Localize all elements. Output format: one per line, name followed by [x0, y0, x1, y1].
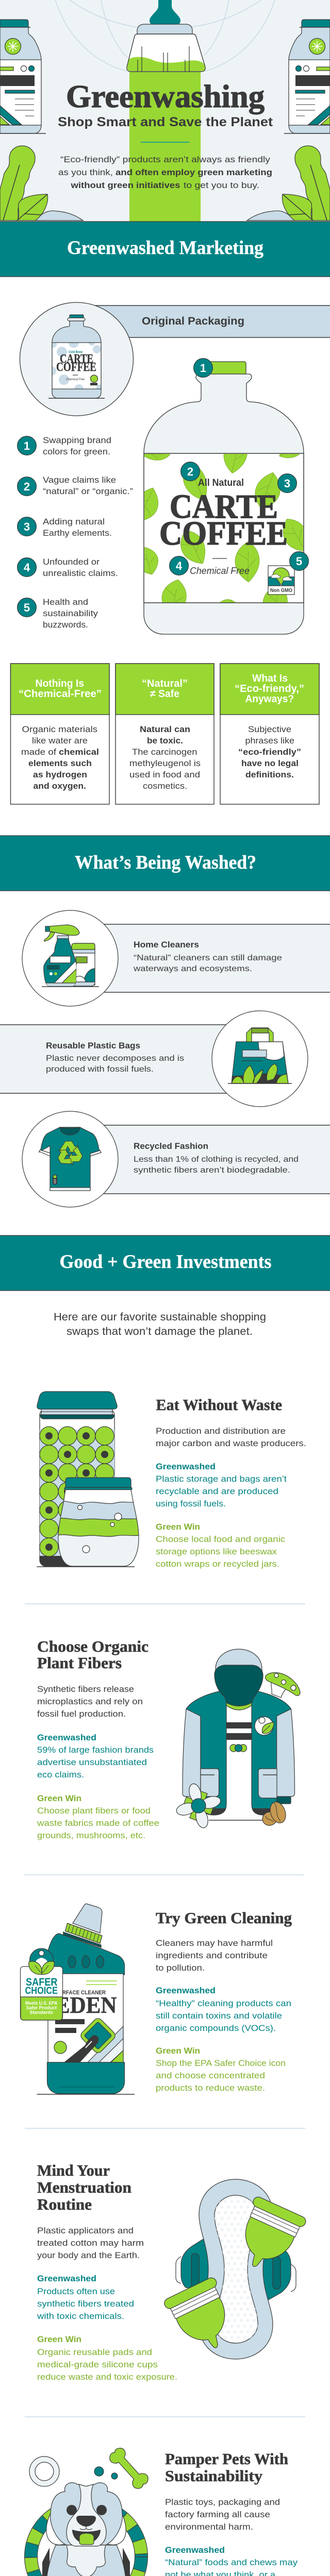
body text: environmental harm.	[165, 2522, 253, 2532]
panel: What Is Eco-friendly card: have no legal	[241, 758, 299, 768]
intro text: to get you to buy.	[184, 180, 259, 190]
body text: factory farming all cause	[165, 2510, 270, 2519]
green win text: and choose concentrated	[156, 2071, 265, 2080]
greenwashed text: “Natural” foods and chews may	[165, 2557, 298, 2567]
panel: choose organic plant fibers	[37, 1637, 300, 1840]
bottle label: CARTE	[170, 488, 278, 526]
item 5: buzzwords.	[43, 620, 88, 630]
green win text: Green Win	[37, 1793, 81, 1803]
icon: cleaner bottle: EDEN	[55, 1992, 117, 2018]
icon: storage jars	[37, 1392, 139, 1569]
heading: Sustainability	[165, 2467, 263, 2485]
heading band: Greenwashed Marketing: Greenwashed Marketing	[67, 238, 263, 259]
green win text: Organic reusable pads and	[37, 2347, 152, 2357]
icon: right plants	[247, 146, 330, 221]
intro text: as you think,	[58, 167, 113, 177]
body text: Synthetic fibers release	[37, 1684, 134, 1694]
text block: Home Cleaners	[134, 940, 199, 950]
intro text: “Eco-friendly” products aren’t always as friendly	[60, 155, 271, 164]
greenwashed text: “Healthy” cleaning products can	[156, 1998, 291, 2008]
icon: safer choice tag: SAFER	[26, 1976, 58, 1988]
item 4: unrealistic claims.	[43, 568, 118, 578]
panel: Nothing Is Chemical-Free card	[10, 664, 109, 804]
greenwashed text: Greenwashed	[37, 2274, 96, 2283]
greenwashed text: recyclable and are produced	[156, 1486, 278, 1496]
Non GMO badge: Non GMO	[270, 588, 292, 594]
green win text	[156, 1522, 286, 1569]
greenwashed text: with toxic chemicals.	[37, 2311, 124, 2321]
icon: dog with rope toy, bones and rings	[23, 2446, 151, 2576]
green win text: waste fabrics made of coffee	[37, 1818, 159, 1828]
greenwashed text: Greenwashed	[156, 1462, 216, 1471]
bottle cap	[209, 362, 246, 374]
item 2: 2	[24, 480, 30, 493]
panel: What Is Eco-friendly card: “Eco-friendy,”	[235, 683, 304, 694]
text block	[134, 1141, 299, 1175]
icon: jacket with mushroom, flower and coffee beans	[175, 1649, 300, 1829]
icon: safer choice tag: Meets U.S. EPA	[25, 2001, 58, 2006]
green win text: Choose plant fibers or food	[37, 1806, 151, 1816]
numbered markers on bottle: 2	[187, 465, 193, 478]
green win text	[37, 2334, 177, 2382]
green win text: medical-grade silicone cups	[37, 2360, 158, 2369]
item 2	[18, 475, 133, 496]
panel: Nothing Is Chemical-Free card: chemical	[59, 747, 99, 757]
icon: original bottle in circle: Cold Brew	[69, 351, 82, 354]
body text	[156, 1426, 306, 1448]
panel: What Is Eco-friendly card: Subjective	[248, 724, 291, 734]
item 5: Health and	[43, 597, 88, 607]
icon: right jar	[284, 20, 330, 133]
icon: original bottle in circle: COFFEE	[56, 361, 96, 374]
panel: What Is Eco-friendly card: phrases like	[245, 736, 294, 745]
green win text: storage options like beeswax	[156, 1547, 277, 1556]
icon: original bottle in circle: Chemical Free	[66, 378, 85, 381]
greenwashed text: eco claims.	[37, 1770, 84, 1780]
icon: bones	[23, 2446, 151, 2576]
body text	[165, 2497, 280, 2532]
icon: left jar	[0, 20, 46, 133]
green win text: Green Win	[156, 2046, 200, 2056]
greenwashed text	[156, 1986, 291, 2033]
greenwashed text	[156, 1462, 287, 1509]
item 1	[18, 435, 111, 456]
heading band: Good + Green Investments: Good + Green Investments	[60, 1251, 271, 1273]
green win text: grounds, mushrooms, etc.	[37, 1831, 145, 1840]
panel: Natural does not equal Safe card: The carcinogen	[132, 747, 197, 757]
item 3: Adding natural	[43, 517, 105, 527]
subtitle: Shop Smart and Save the Planet	[58, 115, 273, 129]
panel: Nothing Is Chemical-Free card: Organic materials	[22, 724, 97, 734]
body text: Cleaners may have harmful	[156, 1938, 273, 1948]
heading: Mind Your	[37, 2161, 110, 2179]
panel: mind your menstruation routine	[37, 2161, 307, 2382]
icon: spray bottle and jar	[41, 925, 99, 987]
body text: to pollution.	[156, 1963, 205, 1973]
greenwashed text: Plastic storage and bags aren’t	[156, 1474, 287, 1484]
item 1: Swapping brand	[43, 435, 111, 445]
panel: Nothing Is Chemical-Free card: Nothing Is	[35, 678, 84, 689]
bottle label: Chemical Free	[190, 566, 250, 576]
item 4: Unfounded or	[43, 557, 100, 567]
intro text: sustainable swaps: swaps that won’t damage the planet.	[67, 1326, 253, 1337]
panel: What Is Eco-friendly card: What Is	[252, 673, 288, 684]
panel: What Is Eco-friendly card: definitions.	[245, 770, 294, 779]
intro text: without green initiatives	[70, 180, 180, 190]
item 1: colors for green.	[43, 447, 110, 456]
item 5	[18, 597, 98, 630]
panel: Nothing Is Chemical-Free card: and oxygen.	[33, 781, 86, 791]
intro text	[58, 155, 272, 190]
heading band: What's Being Washed: What’s Being Washed?	[75, 852, 256, 873]
panel: What Is Eco-friendly card	[220, 664, 319, 804]
numbered markers on bottle: 4	[176, 560, 183, 572]
bottle label: All Natural	[198, 478, 244, 488]
panel: original packaging banner: Original Packaging	[142, 315, 244, 327]
text block: waterways and ecosystems.	[133, 964, 252, 973]
body text: microplastics and rely on	[37, 1697, 143, 1706]
panel: home cleaners	[22, 910, 330, 1006]
title: Greenwashing	[66, 79, 265, 114]
item 3: 3	[24, 520, 30, 533]
text block: Reusable Plastic Bags	[46, 1041, 140, 1050]
body text	[156, 1938, 273, 1973]
item 4	[18, 557, 118, 578]
greenwashed text	[165, 2545, 298, 2576]
item 4: 4	[24, 561, 30, 574]
heading: Try Green Cleaning	[156, 1909, 292, 1927]
bottle label: COFFEE	[159, 515, 288, 552]
numbered markers on bottle: 1	[200, 362, 206, 375]
body text: major carbon and waste producers.	[156, 1438, 306, 1448]
bottle body	[144, 374, 304, 634]
body text: your body and the Earth.	[37, 2250, 140, 2260]
icon: cleaner bottle: SURFACE CLEANER	[55, 1990, 106, 1996]
icon: original bottle in circle: CARTE	[60, 352, 93, 366]
greenwashed text: using fossil fuels.	[156, 1499, 226, 1509]
panel: Nothing Is Chemical-Free card: as hydrogen	[33, 770, 87, 779]
green win text	[37, 1793, 159, 1840]
bottle illustration with greenwashed label	[143, 358, 309, 635]
icon: safer choice tag: CHOICE	[25, 1986, 58, 1996]
green win text	[156, 2046, 286, 2093]
icon: teal dots	[94, 2467, 137, 2576]
text block: Recycled Fashion	[134, 1141, 208, 1151]
greenwashed text: Greenwashed	[156, 1986, 216, 1995]
item 3: Earthy elements.	[43, 528, 112, 538]
panel: try green cleaning	[21, 1904, 292, 2094]
panel: Nothing Is Chemical-Free card: “Chemical-Free”	[19, 688, 102, 700]
heading: Menstruation	[37, 2178, 131, 2196]
green win text: Green Win	[37, 2334, 81, 2344]
numbered markers on bottle: 3	[284, 477, 290, 490]
greenwashed text: synthetic fibers treated	[37, 2299, 134, 2309]
heading: Pamper Pets With	[165, 2450, 288, 2468]
icon: paint brush	[127, 0, 205, 72]
greenwashed text: organic compounds (VOCs).	[156, 2023, 276, 2033]
body text	[37, 2226, 144, 2260]
heading band: Good + Green Investments	[0, 1235, 330, 1291]
icon: safer choice tag: Safer Product	[26, 2005, 57, 2010]
icon: safer choice tag	[21, 1948, 63, 2020]
greenwashed text: Greenwashed	[37, 1733, 96, 1742]
text block: “Natural” cleaners can still damage	[134, 954, 282, 962]
item 3	[18, 517, 112, 538]
body text: fossil fuel production.	[37, 1709, 126, 1719]
heading: Routine	[37, 2195, 92, 2213]
body text: treated cotton may harm	[37, 2238, 144, 2248]
panel: Nothing Is Chemical-Free card: like water are	[32, 736, 88, 745]
body text: ingredients and contribute	[156, 1951, 268, 1960]
text block: synthetic fibers aren’t biodegradable.	[134, 1166, 290, 1175]
Non GMO badge	[268, 566, 294, 595]
heading	[37, 2161, 131, 2213]
panel: Nothing Is Chemical-Free card: elements such	[28, 758, 92, 768]
intro text: sustainable swaps: Here are our favorite sustainable shopping	[54, 1311, 266, 1323]
bottle label	[143, 453, 304, 603]
panel: Natural does not equal Safe card: used in food and	[129, 770, 200, 779]
item 5: 5	[24, 601, 30, 614]
item 2: “natural” or “organic.”	[43, 486, 133, 496]
text block	[46, 1041, 184, 1074]
text block: produced with fossil fuels.	[46, 1065, 154, 1074]
panel: reusable plastic bags	[0, 1011, 308, 1107]
greenwashed text: still contain toxins and volatile	[156, 2011, 282, 2021]
icon: left plants	[0, 146, 83, 221]
panel: What Is Eco-friendly card: “eco-friendly”	[238, 747, 301, 757]
panel: eat without waste	[37, 1392, 306, 1569]
panel: Natural does not equal Safe card: Natural can	[140, 724, 190, 734]
panel: Natural does not equal Safe card: methyleugenol is	[129, 758, 201, 768]
green win text: products to reduce waste.	[156, 2083, 265, 2093]
body text	[37, 1684, 143, 1719]
body text: Plastic applicators and	[37, 2226, 134, 2235]
paint stripe	[129, 72, 201, 222]
green win text: Shop the EPA Safer Choice icon	[156, 2058, 286, 2068]
icon: tote bag	[228, 1028, 292, 1084]
greenwashed text	[37, 2274, 134, 2321]
body text: Production and distribution are	[156, 1426, 286, 1436]
icon: safer choice tag: Standards	[30, 2010, 53, 2015]
text block	[133, 940, 282, 973]
heading: Eat Without Waste	[156, 1396, 282, 1414]
numbered markers on bottle: 5	[296, 555, 302, 568]
greenwashed text: Greenwashed	[165, 2545, 225, 2555]
intro text: and often employ green marketing	[116, 167, 272, 177]
icon: rope toy	[31, 2504, 141, 2576]
heading: Choose Organic	[37, 1637, 148, 1655]
list: greenwashing tactics	[18, 435, 133, 630]
panel: Natural does not equal Safe card	[116, 664, 214, 804]
text block: Plastic never decomposes and is	[46, 1054, 184, 1063]
greenwashed text: Products often use	[37, 2286, 115, 2296]
panel: Natural does not equal Safe card: be toxic.	[147, 736, 183, 745]
panel: Natural does not equal Safe card: ≠ Safe	[150, 688, 179, 700]
panel: What Is Eco-friendly card: Anyways?	[245, 693, 294, 705]
panel: hero	[0, 0, 330, 222]
heading band: Greenwashed Marketing	[0, 222, 330, 277]
panel: pamper pets with sustainability	[23, 2446, 298, 2576]
icon: cleaner bottle	[37, 1904, 135, 2094]
panel: Nothing Is Chemical-Free card: made of	[21, 747, 56, 757]
intro text: sustainable swaps	[54, 1311, 266, 1337]
icon: rubber rings	[29, 2456, 118, 2576]
text block: Less than 1% of clothing is recycled, and	[134, 1155, 299, 1164]
green win text: reduce waste and toxic exposure.	[37, 2372, 177, 2382]
body text: Plastic toys, packaging and	[165, 2497, 280, 2507]
item 1: 1	[24, 439, 30, 452]
icon: reusable pad and menstrual cups	[163, 2179, 307, 2360]
green win text: cotton wraps or recycled jars.	[156, 1559, 279, 1569]
heading	[37, 1637, 148, 1672]
green win text: Green Win	[156, 1522, 200, 1532]
heading: Plant Fibers	[37, 1654, 122, 1672]
panel: original packaging banner	[77, 306, 330, 337]
greenwashed text	[37, 1733, 154, 1780]
panel: recycled fashion	[22, 1111, 330, 1207]
greenwashed text: advertise unsubstantiated	[37, 1757, 147, 1767]
panel: Natural does not equal Safe card: “Natural”	[142, 678, 188, 689]
icon: t-shirt with recycling symbol	[39, 1127, 101, 1191]
greenwashed text: 59% of large fashion brands	[37, 1745, 154, 1755]
panel: Natural does not equal Safe card: cosmetics.	[143, 781, 187, 791]
green win text: Choose local food and organic	[156, 1534, 286, 1544]
item 2: Vague claims like	[43, 475, 116, 485]
numbered markers on bottle	[170, 359, 308, 575]
heading	[165, 2450, 288, 2485]
item 5: sustainability	[43, 608, 98, 618]
icon: original bottle in circle	[20, 302, 133, 416]
heading band: What's Being Washed	[0, 836, 330, 891]
